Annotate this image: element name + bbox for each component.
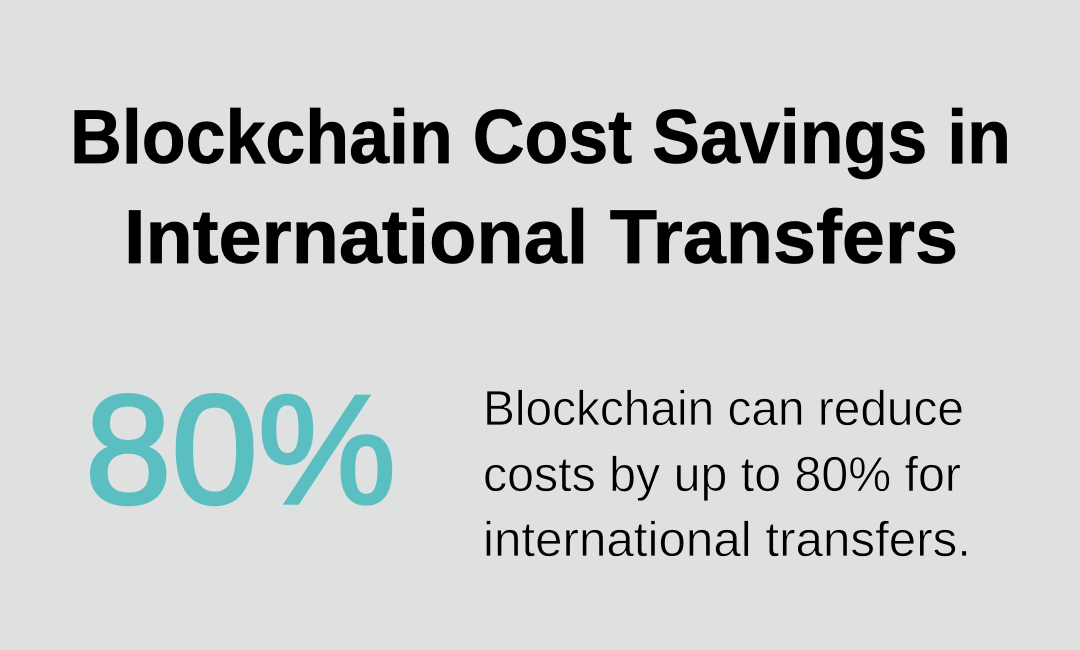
- description text: international transfers.: [483, 513, 971, 567]
- big statistic: 80%: 80%: [85, 363, 396, 536]
- title: International Transfers: [124, 195, 958, 280]
- description text: costs by up to 80% for: [483, 448, 961, 502]
- title: Blockchain Cost Savings in: [70, 95, 1011, 180]
- description text: [483, 382, 971, 567]
- title: [70, 95, 1011, 280]
- description text: Blockchain can reduce: [483, 382, 964, 436]
